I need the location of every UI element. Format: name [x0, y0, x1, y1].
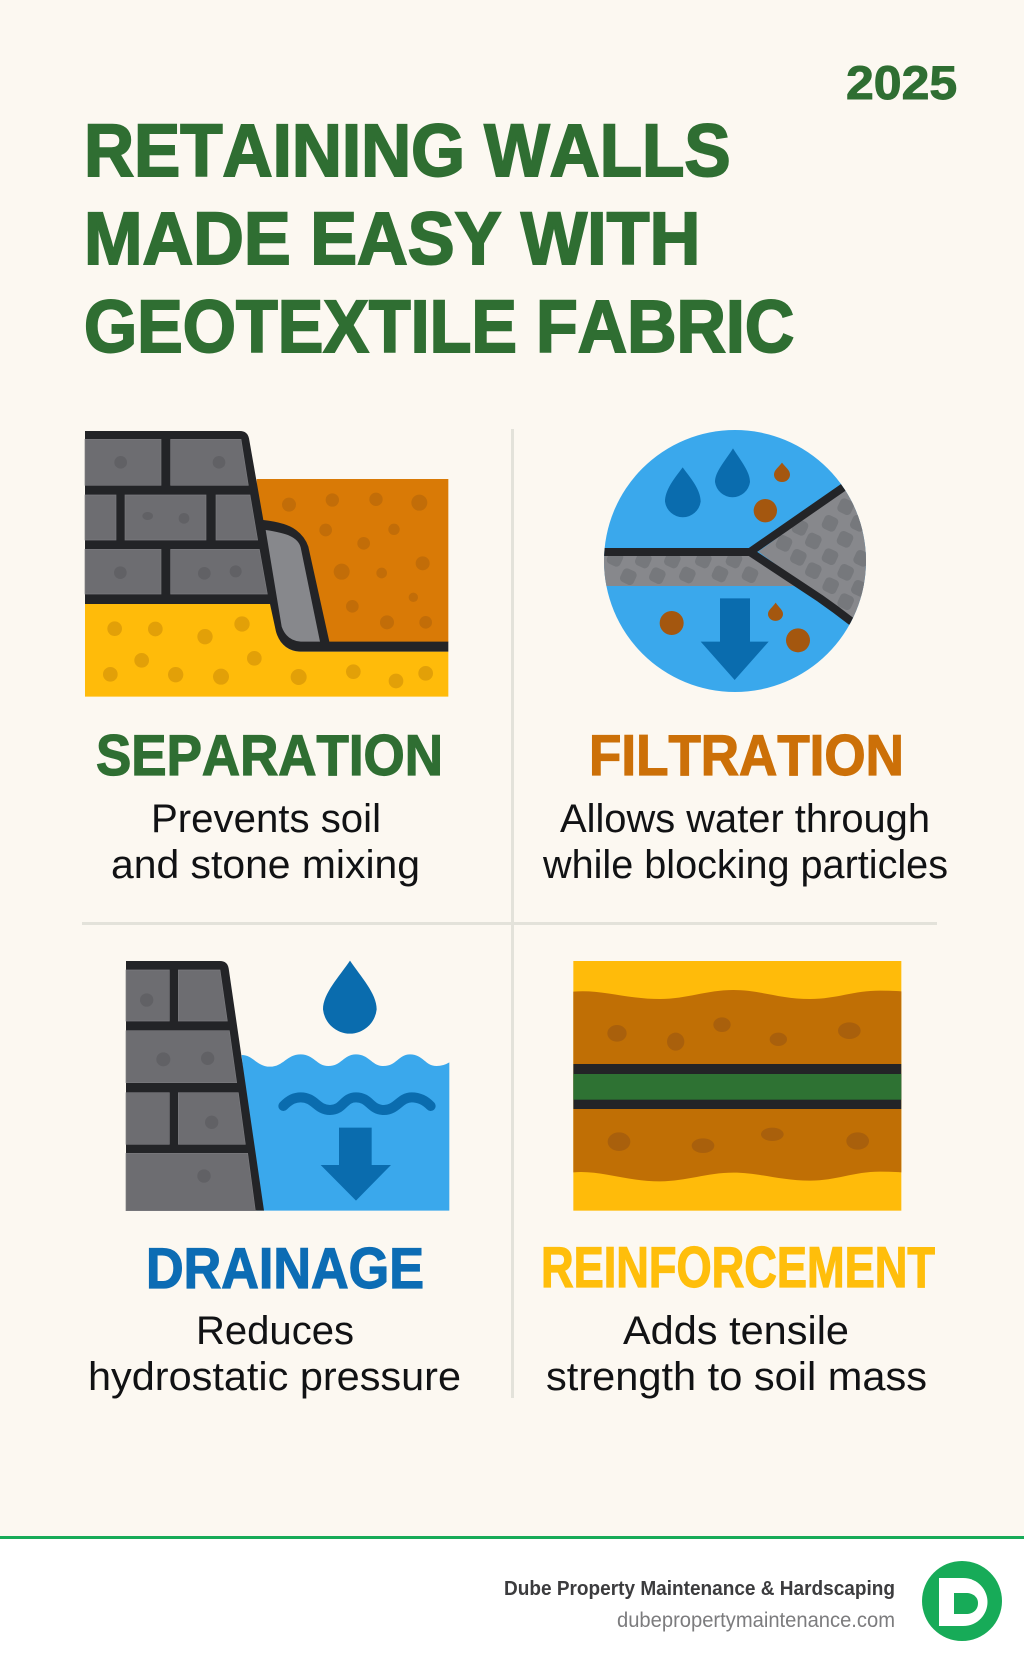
heading: separation: SEPARATION: [96, 723, 443, 787]
description: filtration: while blocking particles: [542, 843, 948, 887]
website: dubepropertymaintenance.com: [617, 1609, 895, 1632]
title: GEOTEXTILE FABRIC: [84, 287, 794, 369]
title: RETAINING WALLS: [84, 110, 731, 193]
panel: filtration: [542, 430, 948, 887]
company name: Dube Property Maintenance & Hardscaping: [504, 1578, 895, 1600]
description: filtration: [542, 797, 948, 887]
icon: soil layers reinforced with fabric: [573, 961, 901, 1211]
year label: 2025: [846, 57, 957, 110]
heading: drainage: DRAINAGE: [146, 1236, 424, 1301]
panel: drainage: [88, 961, 461, 1399]
description: reinforcement: [546, 1309, 927, 1399]
footer: [0, 1536, 1024, 1666]
description: separation: [111, 797, 420, 887]
heading: filtration: FILTRATION: [589, 723, 904, 787]
description: drainage: [88, 1309, 461, 1399]
icon: filtration circle with drops and particles: [593, 430, 880, 692]
panel: separation: [85, 431, 448, 887]
description: reinforcement: strength to soil mass: [546, 1355, 927, 1399]
description: separation: and stone mixing: [111, 843, 420, 887]
icon: retaining wall with soil and fabric separation: [85, 431, 448, 697]
panel: reinforcement: [541, 961, 935, 1399]
description: filtration: Allows water through: [560, 797, 930, 841]
icon: wall with water and down arrow: [126, 961, 449, 1211]
title: [84, 110, 794, 369]
description: drainage: Reduces: [196, 1309, 354, 1353]
description: drainage: hydrostatic pressure: [88, 1355, 461, 1399]
logo: D badge: [922, 1561, 1002, 1641]
description: separation: Prevents soil: [151, 797, 381, 841]
heading: reinforcement: REINFORCEMENT: [541, 1235, 935, 1299]
title: MADE EASY WITH: [84, 198, 700, 280]
description: reinforcement: Adds tensile: [623, 1309, 849, 1353]
